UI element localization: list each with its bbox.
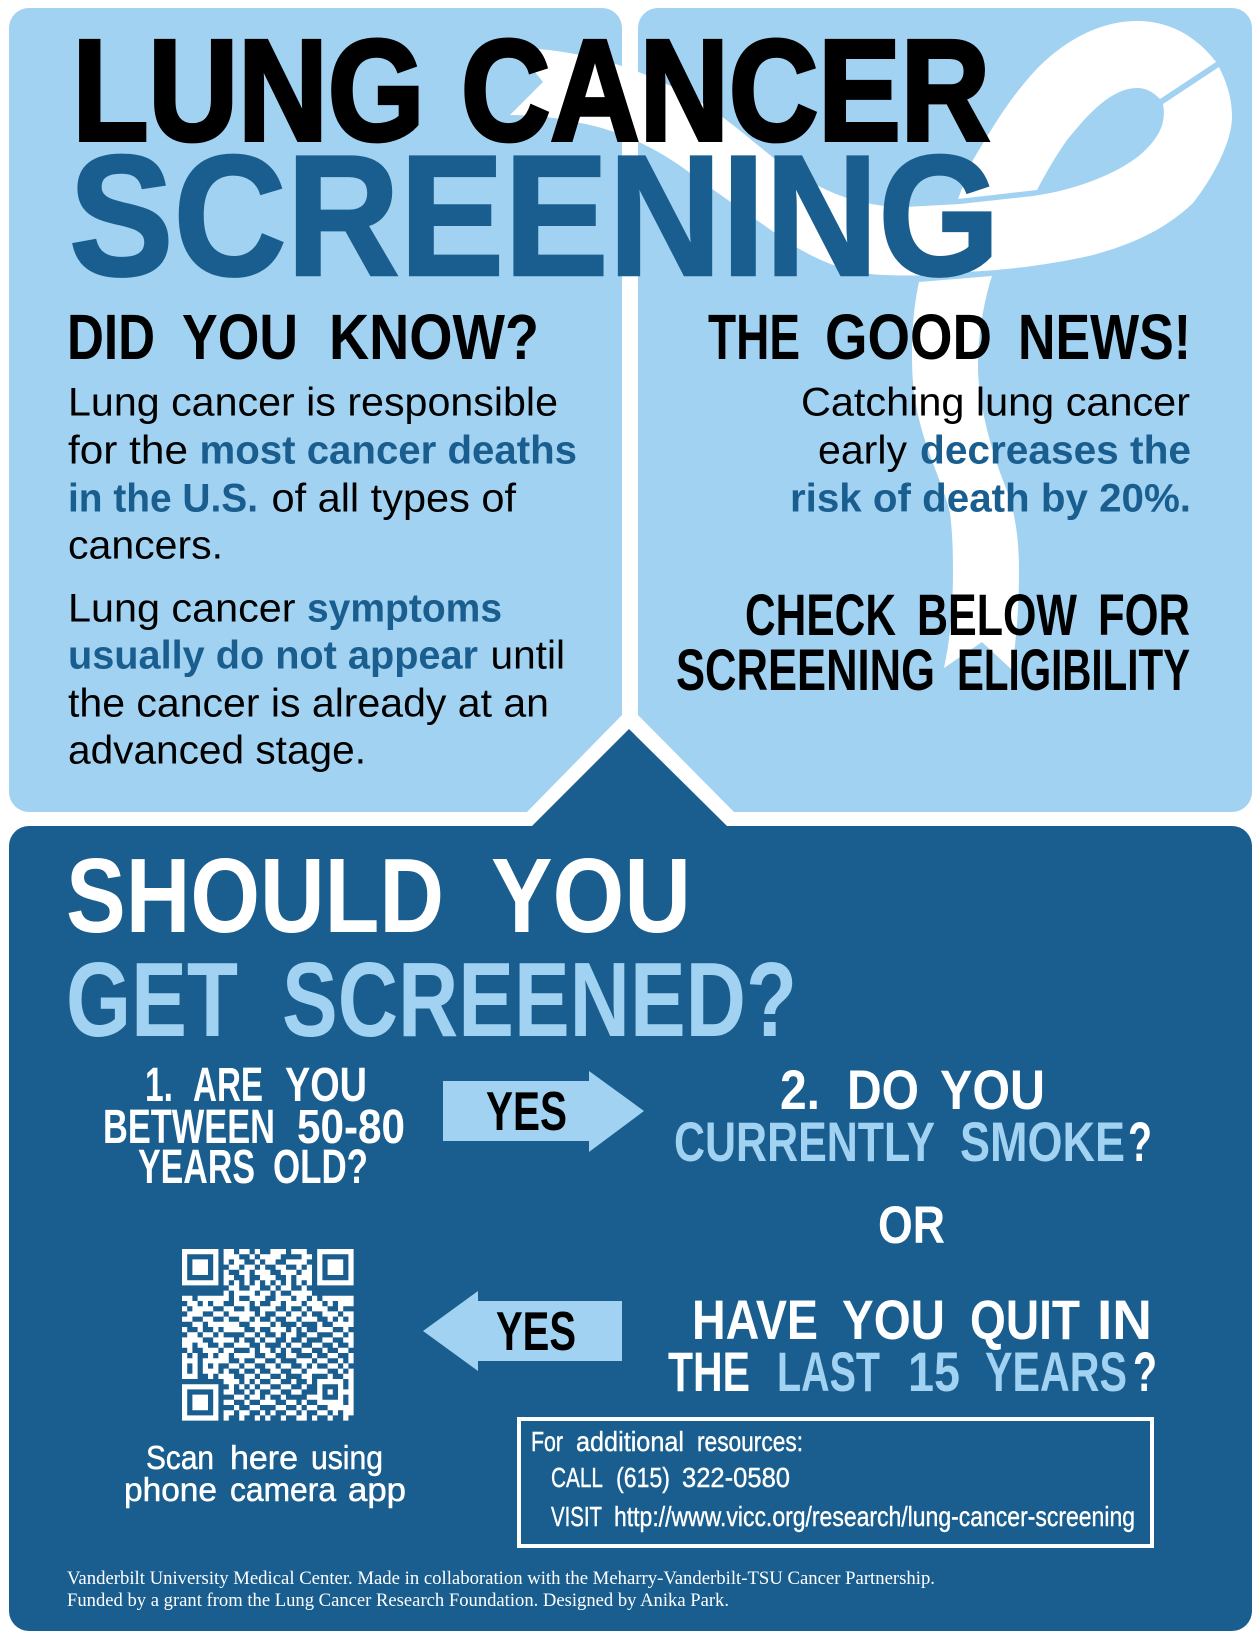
text block: lung cancer deaths: Lung cancer is responsible: [68, 380, 558, 424]
question 2: currently smoke: DO: [847, 1058, 919, 1121]
heading: the good news: THE: [708, 301, 800, 373]
question 2: currently smoke: CURRENTLY: [674, 1110, 935, 1173]
question 1: age: OLD?: [273, 1141, 368, 1194]
question 2: quit smoking: YOU: [842, 1288, 945, 1351]
question 2: quit smoking: YEARS: [985, 1340, 1127, 1403]
heading: the good news: NEWS!: [1018, 301, 1191, 373]
question 1: age: 50-80: [297, 1101, 405, 1154]
question 2: quit smoking: HAVE: [692, 1288, 818, 1351]
heading: the good news: GOOD: [825, 301, 992, 373]
title: screening: SCREENING: [69, 120, 1000, 312]
text block: good news detail: Catching lung cancer: [801, 380, 1190, 424]
heading: did you know: KNOW?: [329, 301, 539, 373]
callout: check below for screening eligibility: SCREENING: [676, 638, 935, 703]
text block: good news detail: risk of death by 20%.: [790, 476, 1191, 520]
question 2: quit smoking: ?: [1133, 1340, 1157, 1403]
heading: get screened: [66, 941, 797, 1059]
text block: symptoms: until: [490, 634, 565, 678]
text block: symptoms: usually do not appear: [68, 634, 478, 678]
question 1: age: BETWEEN: [103, 1101, 275, 1154]
question 1: age: [103, 1059, 405, 1194]
callout: additional resources box: [519, 1419, 1152, 1546]
text: qr code caption: Scan: [146, 1439, 214, 1476]
question 2: currently smoke: ?: [1128, 1110, 1152, 1173]
text: qr code caption: camera: [230, 1471, 337, 1508]
text block: symptoms: the cancer is already at an: [68, 682, 549, 726]
panel: did you know background: [9, 8, 622, 812]
callout: check below for screening eligibility: FOR: [1098, 583, 1190, 648]
question 2: currently smoke: SMOKE: [960, 1110, 1125, 1173]
panel: should you get screened background: [9, 729, 1252, 1631]
panel: good news background: [638, 8, 1252, 812]
footer credits: Funded by a grant from the Lung Cancer Research Foundation. Designed by Anika Park.: [67, 1591, 729, 1611]
question 1: age: YEARS: [138, 1141, 255, 1194]
callout: check below for screening eligibility: [676, 583, 1190, 703]
text block: symptoms: Lung cancer: [68, 586, 296, 630]
callout: additional resources box: For: [531, 1426, 563, 1457]
arrow: yes to qr code: YES: [496, 1300, 576, 1362]
callout: additional resources box: resources:: [697, 1426, 803, 1457]
callout: additional resources box: CALL: [551, 1462, 603, 1493]
text: qr code caption: using: [311, 1439, 383, 1476]
text: or: OR: [878, 1196, 945, 1255]
heading: the good news: [708, 301, 1191, 373]
question 2: quit smoking: [668, 1288, 1157, 1403]
text block: good news detail: early: [818, 428, 907, 472]
text block: lung cancer deaths: most cancer deaths: [200, 428, 577, 472]
heading: get screened: GET: [66, 941, 238, 1059]
heading: did you know: DID: [67, 301, 155, 373]
question 1: age: 1.: [145, 1059, 173, 1112]
callout: additional resources box: 322-0580: [682, 1462, 790, 1493]
question 1: age: YOU: [285, 1059, 367, 1112]
icon: awareness ribbon: [510, 21, 1232, 670]
callout: check below for screening eligibility: CHECK: [745, 583, 896, 648]
question 2: currently smoke: [674, 1058, 1152, 1173]
callout: additional resources box: (615): [616, 1462, 670, 1493]
text: qr code caption: phone: [124, 1471, 217, 1508]
text block: symptoms: symptoms: [307, 586, 502, 630]
text block: good news detail: decreases the: [920, 428, 1191, 472]
question 2: currently smoke: 2.: [780, 1058, 820, 1121]
question 2: currently smoke: YOU: [940, 1058, 1045, 1121]
text block: symptoms: [68, 586, 565, 772]
text block: symptoms: advanced stage.: [68, 728, 366, 772]
text: qr code caption: app: [348, 1471, 406, 1508]
heading: should you: SHOULD: [66, 837, 444, 955]
title: lung cancer: [72, 10, 990, 171]
text block: lung cancer deaths: in the U.S.: [68, 476, 258, 520]
question 2: quit smoking: THE: [668, 1340, 750, 1403]
icon: qr code: [182, 1252, 354, 1418]
heading: get screened: SCREENED?: [282, 941, 797, 1059]
arrow: yes to question 2: [443, 1071, 644, 1152]
callout: check below for screening eligibility: BELOW: [917, 583, 1077, 648]
question 2: quit smoking: LAST: [777, 1340, 880, 1403]
footer credits: [67, 1569, 935, 1611]
question 2: quit smoking: 15: [908, 1340, 960, 1403]
text block: lung cancer deaths: [68, 380, 577, 568]
text block: good news detail: [790, 380, 1191, 520]
arrow: yes to qr code: [423, 1291, 622, 1371]
heading: should you: YOU: [491, 837, 691, 955]
title: lung cancer: LUNG: [72, 10, 424, 171]
text block: lung cancer deaths: cancers.: [68, 524, 223, 568]
text block: lung cancer deaths: of all types of: [272, 476, 517, 520]
callout: additional resources box: http://www.vicc.org/research/lung-cancer-screening: [614, 1501, 1135, 1532]
heading: did you know: YOU: [182, 301, 298, 373]
title: lung cancer: CANCER: [461, 10, 990, 171]
callout: additional resources box: VISIT: [551, 1501, 602, 1532]
question 2: quit smoking: QUIT: [970, 1288, 1080, 1351]
arrow: yes to question 2: YES: [486, 1080, 567, 1142]
question 2: quit smoking: IN: [1097, 1288, 1152, 1351]
question 1: age: ARE: [193, 1059, 263, 1112]
text block: lung cancer deaths: for the: [68, 428, 188, 472]
footer credits: Vanderbilt University Medical Center. Made in collaboration with the Meharry-Vanderbilt-TSU Cancer Partnership.: [67, 1569, 935, 1589]
text: qr code caption: [124, 1439, 406, 1508]
callout: additional resources box: additional: [576, 1426, 684, 1457]
heading: did you know: [67, 301, 539, 373]
text: qr code caption: here: [230, 1439, 298, 1476]
